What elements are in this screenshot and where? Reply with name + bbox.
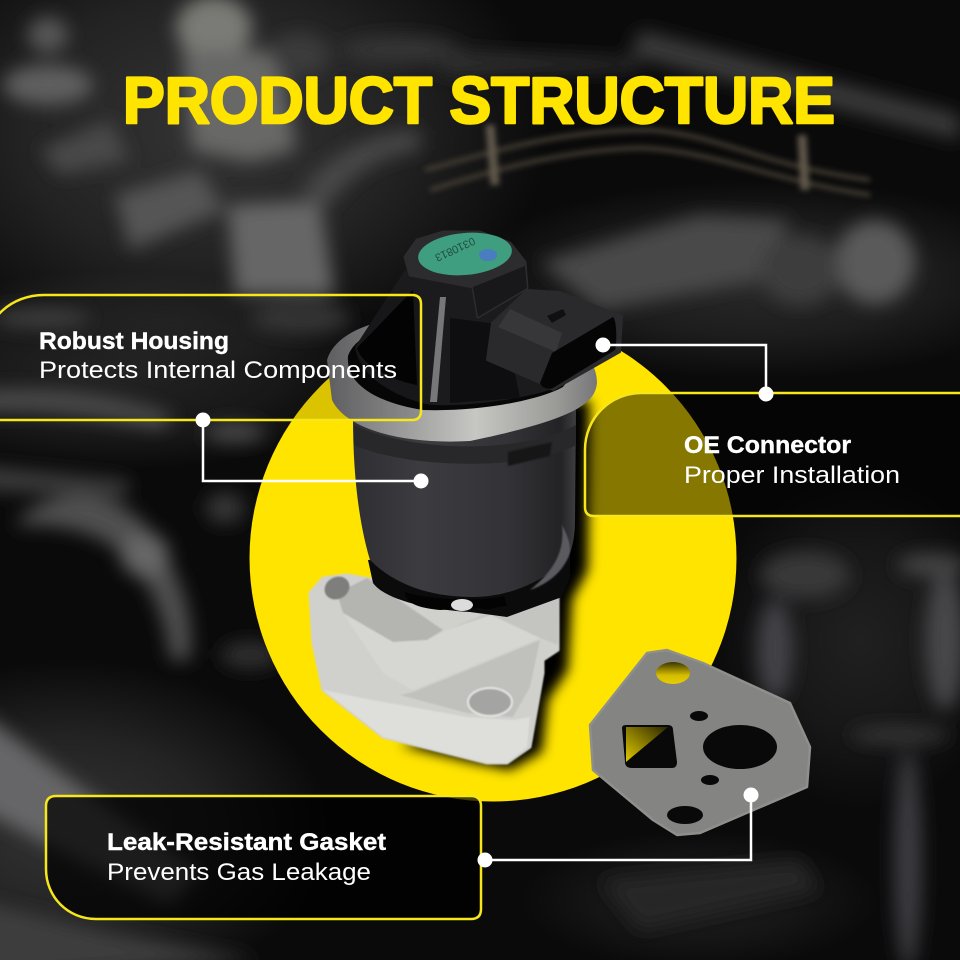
gasket (590, 650, 810, 835)
lower right of top image (540, 215, 790, 310)
heading: Robust Housing: Robust Housing (39, 328, 229, 355)
heading: Leak-Resistant Gasket: Leak-Resistant Gasket (107, 829, 386, 856)
heading: OE Connector: OE Connector (684, 432, 851, 459)
actuator cap body (355, 232, 570, 405)
bottom right tubes (757, 600, 793, 700)
callout line: connector (596, 338, 774, 402)
steel flange ring (327, 314, 597, 442)
description: Proper Installation: Proper Installation (684, 462, 900, 489)
panel: Robust Housing (0, 295, 421, 420)
brown pipes (425, 125, 870, 195)
callout line: gasket (478, 788, 758, 868)
green label (416, 229, 514, 279)
green label: 0310813 (433, 234, 477, 263)
title: PRODUCT STRUCTURE (123, 63, 835, 137)
black cylinder housing (353, 410, 576, 597)
product: EGR valve (310, 229, 810, 835)
yellow circle backdrop (250, 314, 736, 802)
black collar and pin (368, 550, 570, 617)
panel: Leak-Resistant Gasket (46, 796, 481, 919)
panel: OE Connector (585, 393, 960, 516)
description: Protects Internal Components: Protects Internal Components (39, 357, 397, 384)
callout line: housing (196, 412, 428, 488)
product shadow (400, 400, 590, 770)
top canisters (176, 0, 252, 60)
electrical connector (487, 290, 622, 390)
description: Prevents Gas Leakage: Prevents Gas Leakage (107, 859, 371, 886)
dark mass and arc, bottom left (0, 465, 130, 498)
silver mounting base (310, 572, 558, 763)
flange interior (348, 320, 570, 410)
mid-left streaks (0, 389, 175, 428)
